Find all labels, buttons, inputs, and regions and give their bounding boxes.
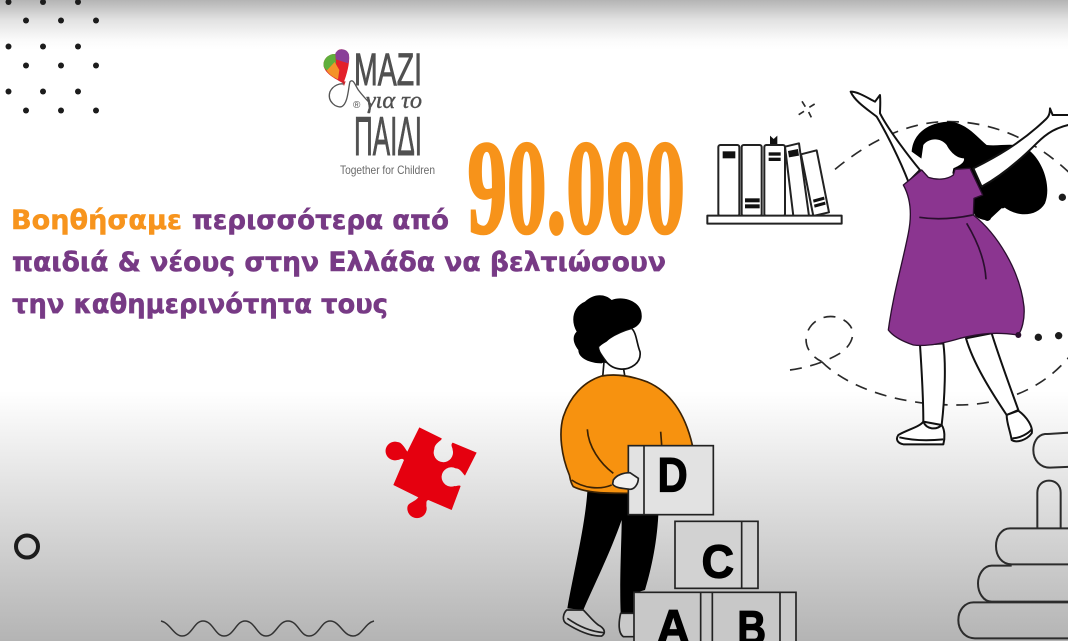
boy shoes: [563, 610, 635, 637]
sparkle: [799, 101, 815, 117]
decorative dots: [1035, 194, 1066, 341]
logo: Mazi gia to Paidi: [324, 44, 435, 177]
illustration: girl with dashed path: [790, 92, 1068, 444]
girl legs: [897, 333, 1032, 444]
squiggle line: [161, 621, 374, 636]
block D: [628, 446, 713, 515]
logo words gia to: για το: [366, 88, 422, 114]
icon: puzzle heart balloon: [324, 49, 372, 107]
logo tagline: Together for Children: [340, 163, 435, 177]
boy pants: [567, 492, 658, 614]
illustration: stacking ring toy: [958, 433, 1068, 638]
logo: Mazi gia to Paidi: ΠΑΙΔΙ: [354, 105, 422, 167]
icon: black ring: [16, 536, 38, 558]
boy neck: [603, 362, 625, 377]
headline line 2: παιδιά & νέους στην Ελλάδα να βελτιώσουν: [12, 247, 666, 278]
block A: [634, 592, 712, 641]
icon: books on shelf: [707, 136, 842, 224]
boy hair: [573, 295, 642, 363]
icon: red puzzle piece: [386, 427, 477, 518]
block B: [712, 592, 796, 641]
illustration: boy stacking letter blocks: [561, 295, 796, 641]
block C: [675, 521, 758, 588]
logo registered mark: ®: [353, 100, 361, 111]
headline text: [11, 205, 666, 320]
girl dress: [888, 168, 1024, 345]
headline line 1 purple: περισσότερα από: [192, 205, 449, 236]
headline line 3: την καθημερινότητα τους: [12, 289, 388, 320]
block D: D: [658, 449, 688, 503]
block C: C: [702, 536, 734, 588]
dashed orbit: [790, 122, 1068, 405]
girl hair: [912, 122, 1047, 221]
girl face: [921, 139, 964, 179]
boy sweater: [561, 375, 692, 493]
boy hand: [613, 473, 638, 489]
boy face: [598, 328, 640, 369]
logo word MAZI: ΜΑΖΙ: [354, 44, 422, 95]
big number 90.000: 90.000: [468, 113, 685, 262]
headline line 1 orange: Βοηθήσαμε: [11, 205, 182, 236]
girl arms: [851, 92, 1068, 187]
dot grid top left: [6, 0, 99, 114]
